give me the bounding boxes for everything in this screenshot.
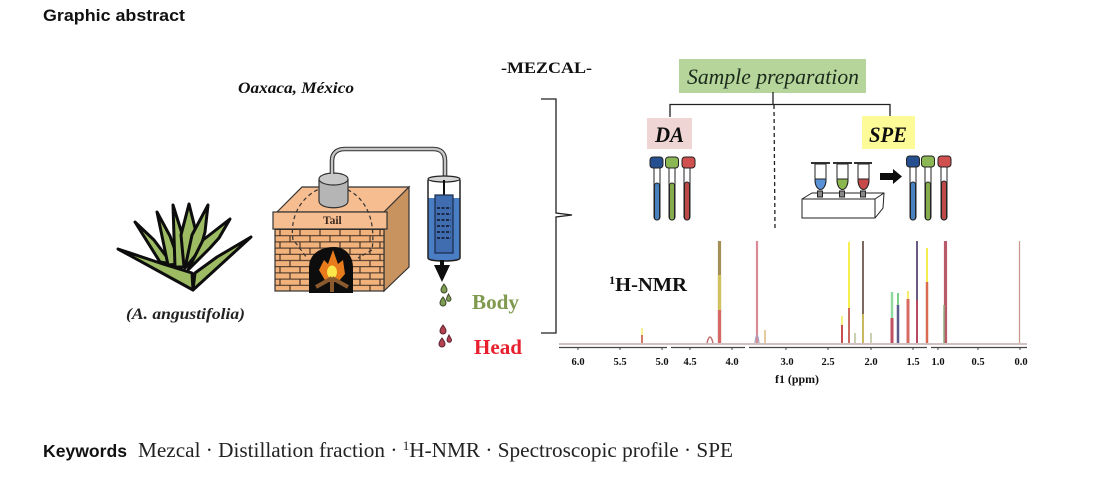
axis labels: 0.5 bbox=[971, 357, 985, 368]
fireplace with flames bbox=[309, 247, 353, 293]
label: -MEZCAL-: -MEZCAL- bbox=[501, 60, 592, 77]
axis labels: 2.0 bbox=[864, 357, 878, 368]
axis labels: 1.5 bbox=[906, 357, 920, 368]
tubes: SPE bbox=[906, 156, 951, 220]
dashed divider bbox=[774, 105, 775, 230]
red drops bbox=[439, 325, 452, 347]
sample preparation tree bbox=[647, 59, 951, 230]
dashed dome bbox=[292, 186, 373, 250]
bracket bbox=[541, 99, 572, 333]
box: DA: DA bbox=[654, 122, 684, 147]
axis labels: 2.5 bbox=[821, 357, 835, 368]
label: Tail: Tail bbox=[323, 215, 342, 227]
label: Head: Head bbox=[474, 335, 522, 359]
spectrum peaks bbox=[642, 241, 1020, 343]
keywords line: H-NMR · Spectroscopic profile · SPE bbox=[409, 438, 733, 462]
axis labels: 4.0 bbox=[725, 357, 739, 368]
keywords line: 1 bbox=[403, 438, 409, 453]
condenser bbox=[428, 176, 460, 261]
axis bbox=[559, 346, 1027, 348]
label: Body: Body bbox=[472, 290, 520, 314]
axis labels: 5.0 bbox=[655, 357, 669, 368]
SPE cartridges and manifold bbox=[802, 163, 884, 218]
green drops bbox=[440, 284, 451, 306]
box: SPE: SPE bbox=[869, 122, 907, 147]
axis labels: 5.5 bbox=[613, 357, 627, 368]
axis labels: 6.0 bbox=[571, 357, 585, 368]
heading box: sample preparation bbox=[679, 59, 866, 93]
label: 1H-NMR: H-NMR bbox=[615, 274, 688, 296]
axis labels: 3.0 bbox=[780, 357, 794, 368]
axis labels: 1.0 bbox=[931, 357, 945, 368]
keywords line bbox=[43, 438, 733, 462]
tree connectors bbox=[670, 92, 890, 118]
box: SPE bbox=[862, 116, 915, 149]
baseline bbox=[559, 343, 1027, 345]
box: DA bbox=[647, 118, 692, 149]
icon: agave plant bbox=[118, 204, 251, 290]
keywords line: Keywords bbox=[43, 441, 127, 461]
chart: 1H-NMR spectrum bbox=[559, 241, 1028, 386]
label: Oaxaca, México: Oaxaca, México bbox=[238, 80, 354, 97]
label: A. angustifolia: (A. angustifolia) bbox=[126, 306, 245, 323]
heading box: sample preparation: Sample preparation bbox=[687, 64, 859, 89]
keywords line: Mezcal · Distillation fraction · bbox=[138, 438, 395, 462]
axis labels: 0.0 bbox=[1014, 357, 1028, 368]
label: 1H-NMR: 1 bbox=[609, 273, 615, 287]
axis title: f1 (ppm) bbox=[775, 372, 819, 386]
axis labels bbox=[571, 357, 1028, 368]
tubes: DA bbox=[650, 157, 695, 220]
axis labels: 4.5 bbox=[683, 357, 697, 368]
arrow right bbox=[880, 169, 902, 184]
furnace body bbox=[273, 187, 409, 291]
connecting pipe bbox=[332, 149, 445, 178]
illustration: distillation furnace bbox=[273, 149, 460, 347]
heading: graphic abstract: Graphic abstract bbox=[43, 6, 185, 25]
arrow down bbox=[434, 260, 450, 282]
still pot bbox=[319, 173, 348, 208]
